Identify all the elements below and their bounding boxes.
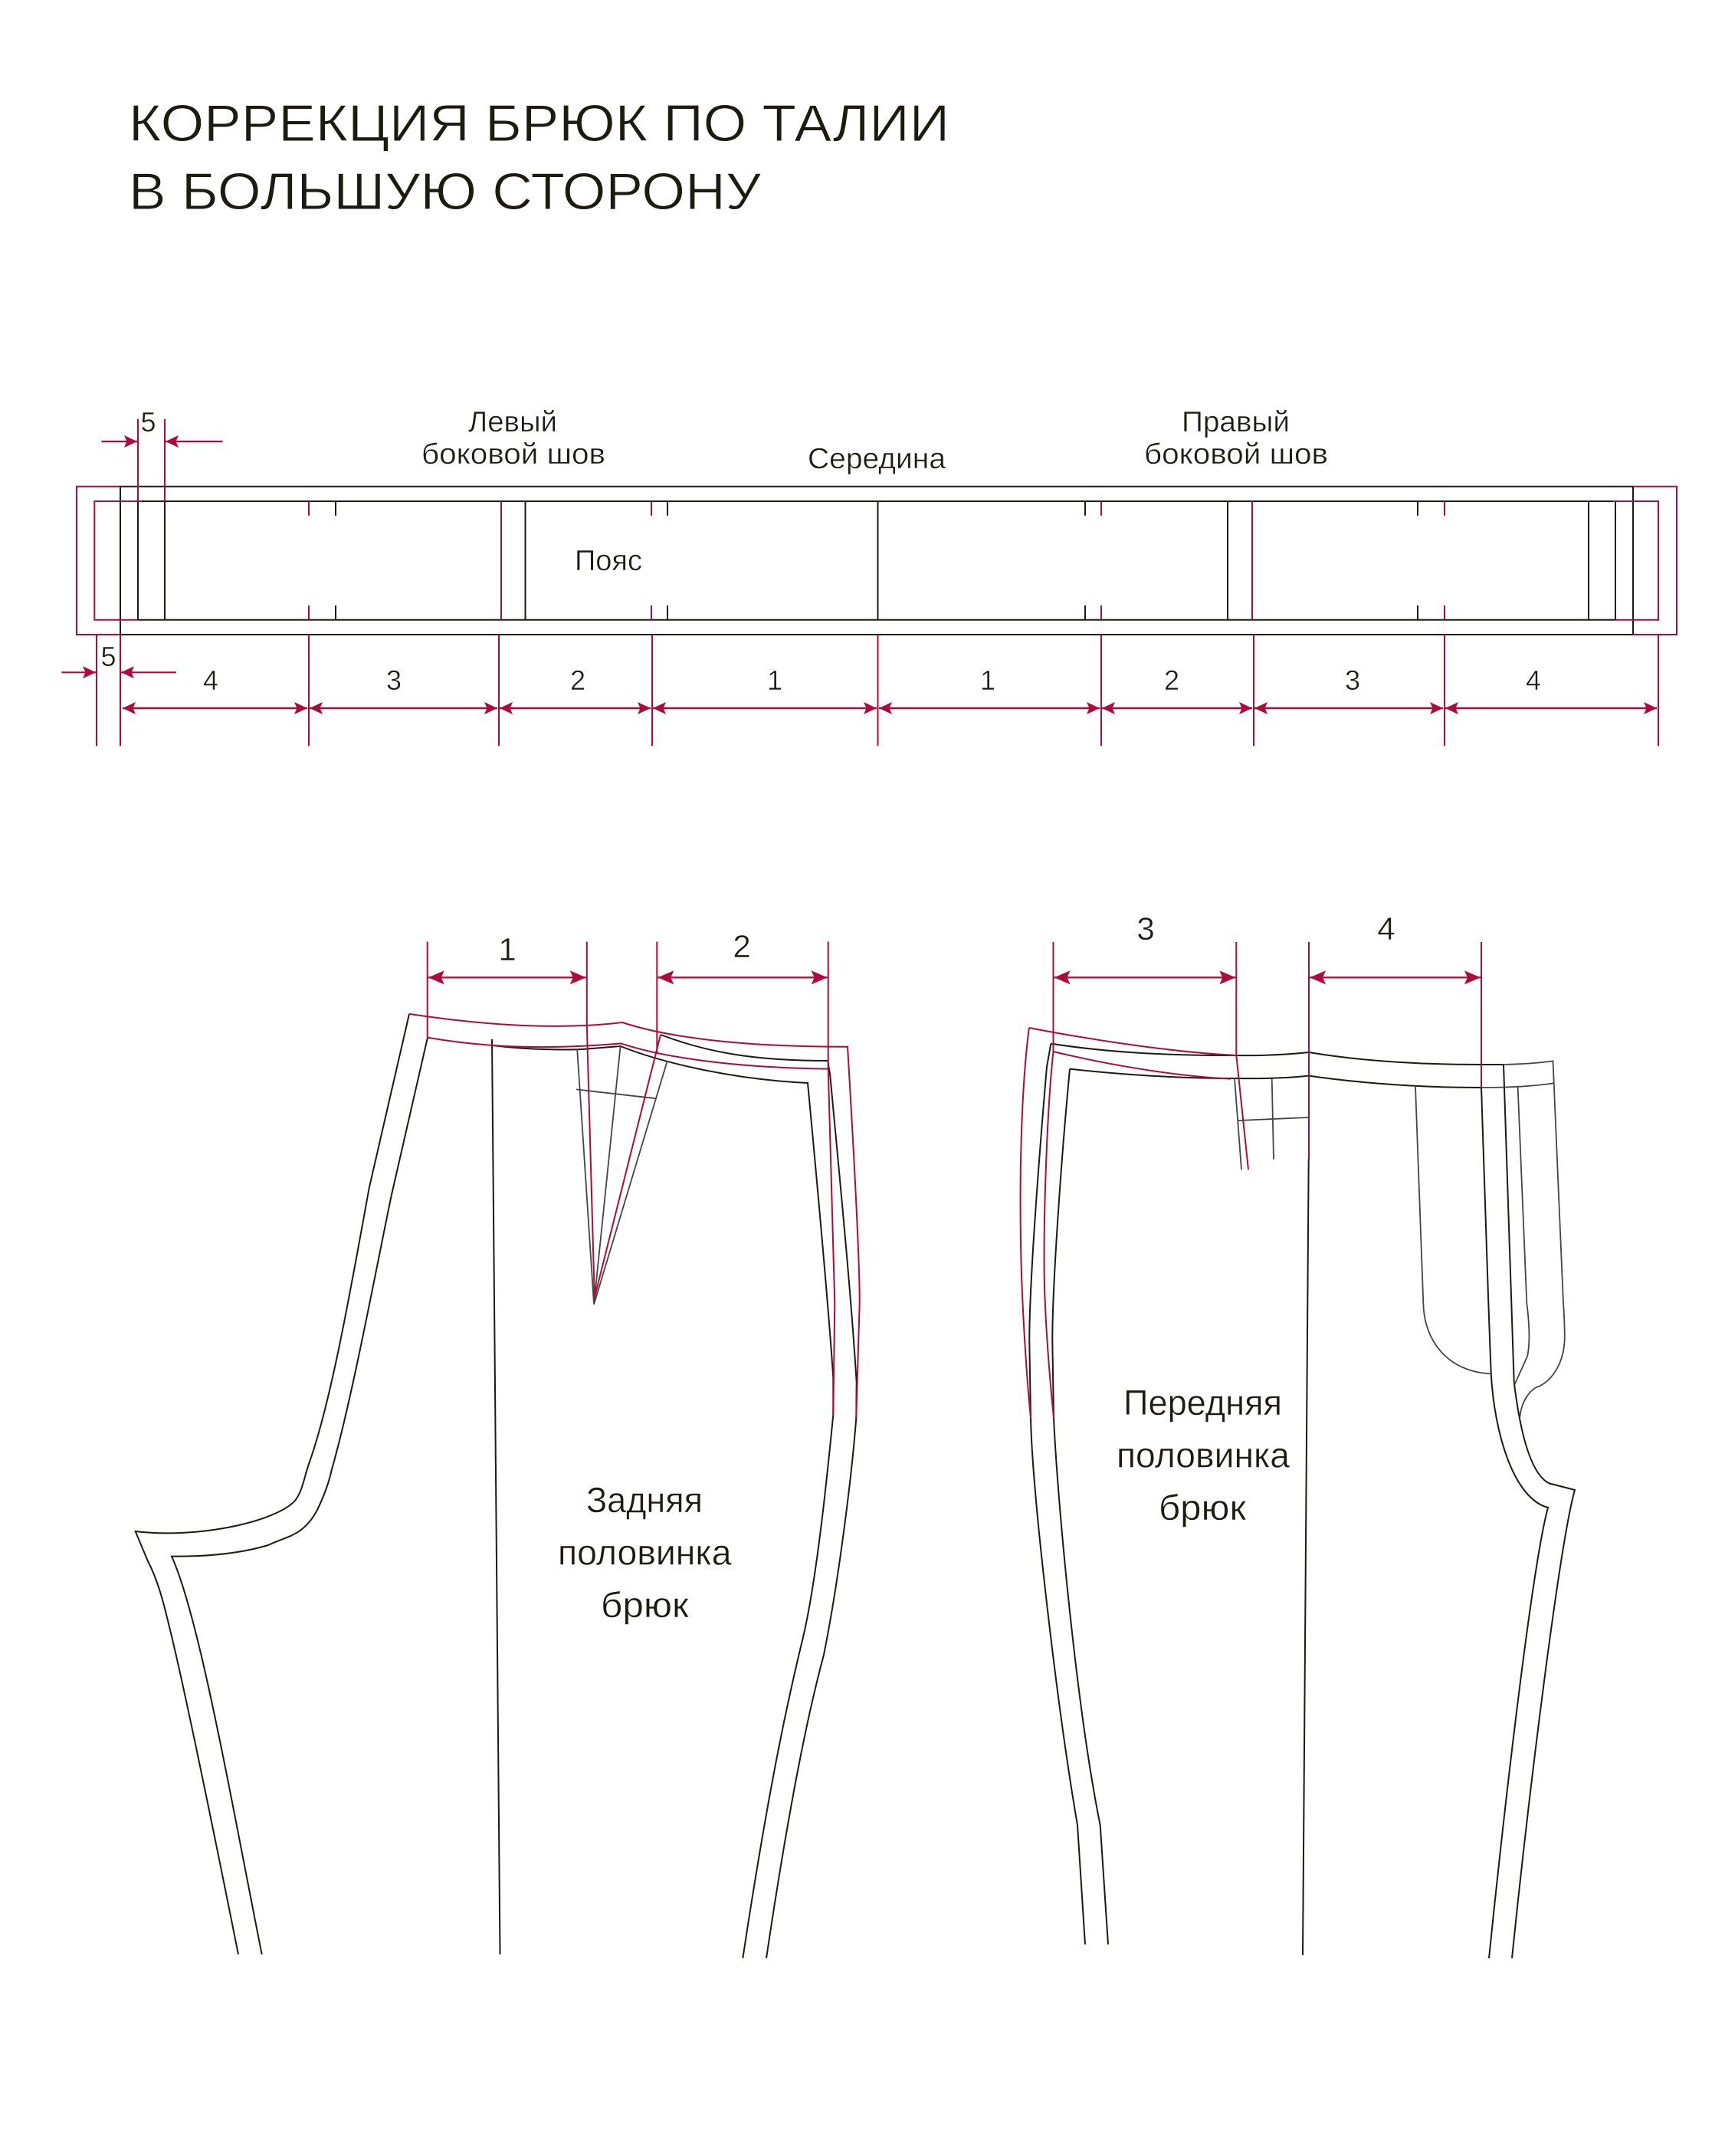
title (129, 94, 949, 221)
waistband dimension lines 4 3 2 1 1 2 3 4: 3 (386, 665, 402, 696)
back dart (576, 1046, 667, 1304)
waistband dimension lines 4 3 2 1 1 2 3 4: 4 (1526, 665, 1541, 696)
label: back half of trousers: половинка (558, 1533, 732, 1573)
waistband red correction lines (77, 487, 1677, 635)
label: front half of trousers: половинка (1117, 1436, 1290, 1475)
back dimension 1 (428, 931, 587, 1038)
label: right side seam (1144, 406, 1328, 471)
label: right side seam: Правый (1182, 406, 1290, 438)
front dimension 4: 4 (1377, 911, 1395, 947)
label: left side seam (421, 406, 605, 471)
waistband dimension lines 4 3 2 1 1 2 3 4 (123, 635, 1658, 746)
back dimension 1: 1 (498, 931, 517, 967)
label: waistband: Пояс (575, 545, 642, 577)
front dimension 3: 3 (1136, 911, 1155, 947)
back half red correction (409, 1014, 860, 1418)
waistband top dimension 5: 5 (140, 406, 156, 438)
front dimension 3 (1053, 911, 1236, 1055)
waistband black outline (120, 487, 1633, 635)
panel: waistband diagram (61, 406, 1677, 746)
waistband lower dimension 5 (61, 635, 176, 746)
title: В БОЛЬШУЮ СТОРОНУ (129, 162, 762, 221)
front dimension 4 (1309, 911, 1481, 1159)
label: left side seam: боковой шов (421, 438, 605, 471)
front pocket (1415, 1061, 1565, 1417)
label: right side seam: боковой шов (1144, 438, 1328, 471)
waistband dimension lines 4 3 2 1 1 2 3 4: 3 (1345, 665, 1360, 696)
panel: front trouser half (1021, 911, 1575, 1958)
label: back half of trousers: Задняя (586, 1480, 703, 1520)
waistband dimension lines 4 3 2 1 1 2 3 4: 2 (570, 665, 585, 696)
back half black contour (136, 1014, 857, 1958)
waistband dimension lines 4 3 2 1 1 2 3 4: 1 (767, 665, 782, 696)
label: left side seam: Левый (468, 406, 557, 438)
waistband dimension lines 4 3 2 1 1 2 3 4: 2 (1164, 665, 1179, 696)
front half black contour (1029, 1044, 1575, 1958)
label: front half of trousers: брюк (1159, 1488, 1247, 1528)
front dart (1235, 1078, 1308, 1170)
label: front half of trousers: Передняя (1123, 1383, 1282, 1423)
back dimension 2 (657, 928, 828, 1069)
back dimension 2: 2 (733, 928, 751, 964)
label: front half of trousers (1117, 1383, 1290, 1528)
panel: back trouser half (136, 928, 860, 1958)
waistband top dimension 5 (101, 406, 223, 501)
waistband dimension lines 4 3 2 1 1 2 3 4: 1 (980, 665, 995, 696)
label: back half of trousers: брюк (601, 1585, 690, 1625)
waistband lower dimension 5: 5 (100, 641, 116, 672)
title: КОРРЕКЦИЯ БРЮК ПО ТАЛИИ (129, 94, 949, 153)
label: back half of trousers (558, 1480, 732, 1625)
front half red correction (1021, 1028, 1248, 1418)
waistband dimension lines 4 3 2 1 1 2 3 4: 4 (203, 665, 218, 696)
label: middle: Середина (808, 443, 946, 475)
